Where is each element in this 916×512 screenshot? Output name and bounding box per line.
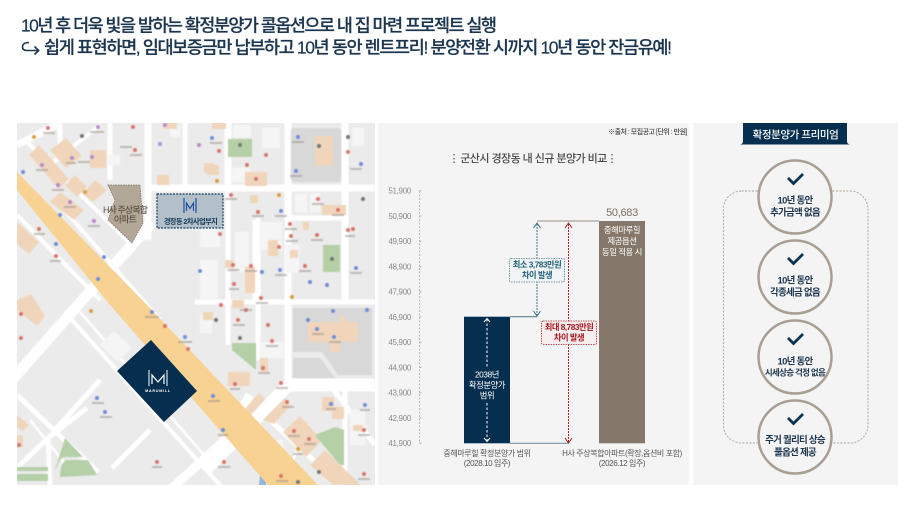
premium item 1: 추가금액 없음 xyxy=(770,206,821,218)
y axis: 42,900 xyxy=(388,414,412,423)
panel heading: 확정분양가 프리미엄 xyxy=(753,128,838,141)
callout: minimum difference: 차이 발생 xyxy=(522,270,552,280)
y axis: 48,900 xyxy=(388,262,412,272)
bar label xyxy=(469,370,506,400)
bar label xyxy=(602,225,642,257)
dashed frame xyxy=(724,191,868,443)
H site label xyxy=(104,205,148,224)
map buildings xyxy=(17,123,363,485)
y axis: 45,900 xyxy=(388,338,412,347)
bar label: 2038년 xyxy=(475,370,499,380)
premium item 3: 10년 동안 xyxy=(778,356,813,368)
premium item 1: 10년 동안 xyxy=(778,194,813,206)
premium item 3: 시세상승 걱정 없음 xyxy=(765,368,826,378)
Marumill marker: MARUMILL xyxy=(145,389,171,393)
Marumill marker xyxy=(117,340,197,422)
chart title: ⋮ xyxy=(448,153,460,165)
x axis labels: 중해마루힐 확정분양가 범위 xyxy=(443,448,531,458)
POI markers xyxy=(17,125,366,478)
premium item 4 xyxy=(758,400,832,474)
minimum difference arrow xyxy=(534,223,540,316)
title xyxy=(21,16,672,58)
y axis: 50,900 xyxy=(388,212,412,221)
y axis: 47,900 xyxy=(388,288,412,296)
project site box: 경장동 2차사업부지 xyxy=(164,217,217,226)
panel: guaranteed price premium xyxy=(693,123,898,485)
panel: location map xyxy=(12,123,375,490)
y axis: 43,900 xyxy=(388,388,412,398)
callout: maximum difference: 차이 발생 xyxy=(554,332,584,342)
icon: check xyxy=(788,254,803,264)
map roads xyxy=(12,123,375,490)
bar label: 동일 적용 시 xyxy=(602,247,642,257)
y axis: 41,900 xyxy=(388,439,412,448)
x axis labels: (2028.10 입주) xyxy=(464,459,511,468)
y axis xyxy=(388,186,422,448)
premium item 2 xyxy=(758,240,832,314)
icon: check xyxy=(788,334,803,344)
Marumill logo xyxy=(149,370,167,386)
POI label strokes xyxy=(34,132,370,481)
site logo xyxy=(184,198,196,213)
bar: H company apartment xyxy=(599,221,645,443)
connector lines xyxy=(510,221,599,443)
bar label: 범위 xyxy=(480,390,494,400)
icon: check xyxy=(788,174,803,184)
y axis: 44,900 xyxy=(388,364,412,372)
premium item 4: 주거 퀄리티 상승 xyxy=(765,434,826,446)
bar label: 확정분양가 xyxy=(469,380,506,390)
value label: 50,683 xyxy=(606,207,638,219)
bar label: 중해마루힐 xyxy=(604,225,640,235)
maximum difference arrow xyxy=(565,223,572,443)
premium item 3 xyxy=(758,320,832,394)
map compounds xyxy=(291,128,372,378)
H site building xyxy=(103,185,148,243)
map canal xyxy=(259,476,266,485)
source note: ※출처 : 모집공고 [단위 : 만원] xyxy=(608,127,688,136)
bar: guaranteed price range xyxy=(464,317,510,443)
x axis labels: (2026.12 입주) xyxy=(599,459,646,468)
title: 쉽게 표현하면, 임대보증금만 납부하고 10년 동안 렌트프리! 분양전환 시까지 10년 동안 잔금유예! xyxy=(44,38,672,58)
chart title: 군산시 경장동 내 신규 분양가 비교 xyxy=(460,152,607,165)
title: 10년 후 더욱 빛을 발하는 확정분양가 콜옵션으로 내 집 마련 프로젝트 실행 xyxy=(21,16,497,36)
panel: price comparison chart xyxy=(378,123,689,485)
project site box xyxy=(157,194,223,228)
premium item 1 xyxy=(758,160,832,234)
premium item 4: 풀옵션 제공 xyxy=(774,446,817,458)
panel heading xyxy=(740,123,850,144)
bar label: 제공옵션 xyxy=(608,236,636,246)
premium item 2: 10년 동안 xyxy=(778,274,813,286)
H site label: H사 주상복합 xyxy=(103,204,148,215)
callout: minimum difference xyxy=(510,258,564,282)
callout: maximum difference: 최대 8,783만원 xyxy=(545,322,593,332)
y axis: 46,900 xyxy=(388,313,412,322)
callout: maximum difference xyxy=(542,321,596,344)
chart title: ⋮ xyxy=(606,153,618,165)
icon: check xyxy=(788,414,803,424)
x axis labels xyxy=(443,448,683,468)
main road xyxy=(17,172,318,485)
premium item 2: 각종세금 없음 xyxy=(770,286,821,298)
x axis labels: H사 주상복합아파트(확장,옵션비 포함) xyxy=(562,448,683,458)
callout: minimum difference: 최소 3,783만원 xyxy=(513,260,561,270)
H site label: 아파트 xyxy=(114,214,137,224)
map white plots xyxy=(100,125,365,454)
map parks xyxy=(17,139,344,481)
y axis: 51,900 xyxy=(388,186,412,196)
range arrow xyxy=(484,318,490,442)
y axis: 49,900 xyxy=(388,237,412,246)
icon: title arrow xyxy=(22,42,39,54)
